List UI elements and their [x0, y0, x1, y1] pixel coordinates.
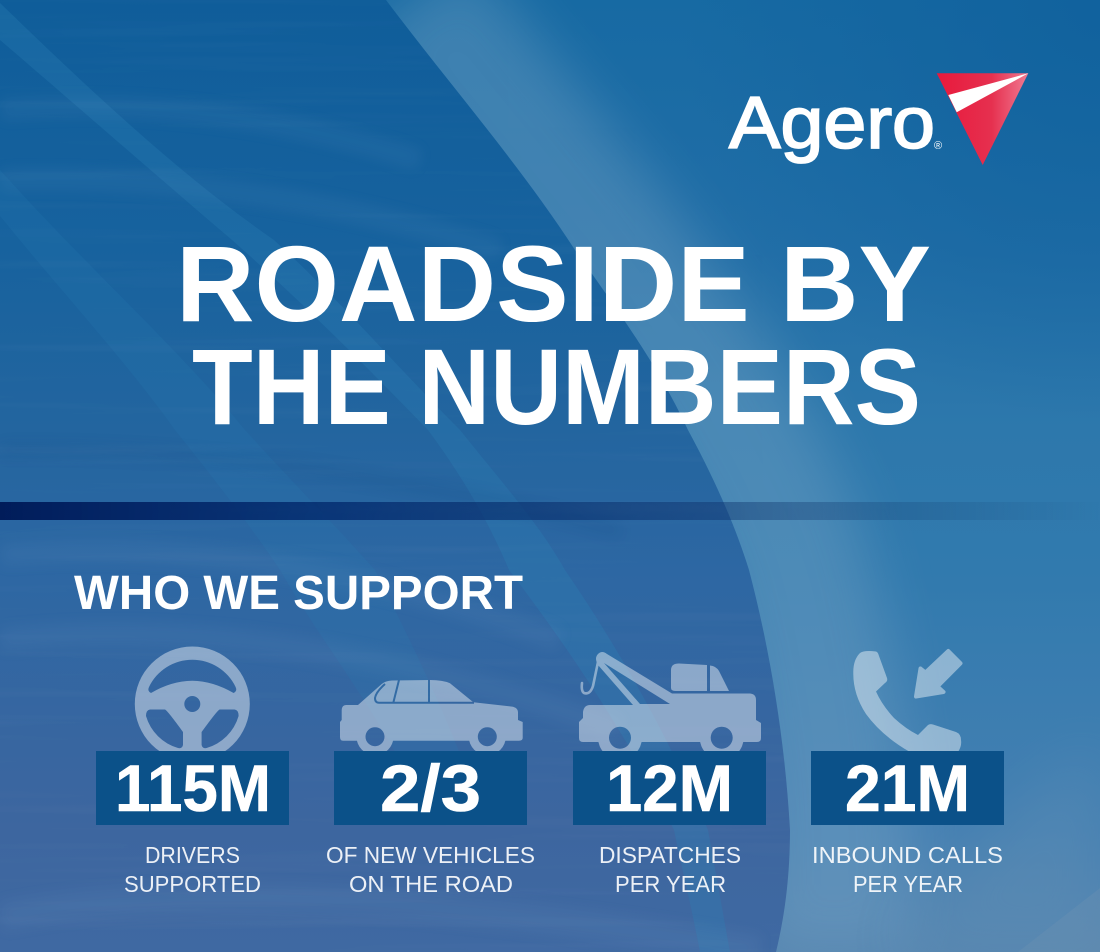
label: inbound calls: PER YEAR: [853, 871, 963, 897]
label: drivers supported: SUPPORTED: [124, 871, 261, 897]
icon: inbound phone: [850, 645, 968, 751]
label: new vehicles: ON THE ROAD: [349, 871, 513, 897]
horizontal band: [0, 502, 1100, 520]
icon: tow truck: [576, 648, 764, 751]
icon: car: [336, 676, 526, 751]
stat box: 12M: [573, 751, 766, 825]
label: new vehicles: [326, 842, 535, 897]
stat box: 2/3: [334, 751, 527, 825]
section heading: WHO WE SUPPORT: [74, 567, 523, 620]
title: THE NUMBERS: [192, 326, 921, 447]
icon: steering wheel: [134, 646, 250, 751]
stat box: 115M: 115M: [115, 751, 271, 825]
stat box: 21M: [811, 751, 1004, 825]
title: ROADSIDE BY: [176, 223, 931, 344]
title: [176, 223, 931, 447]
stat box: 2/3: 2/3: [380, 751, 481, 825]
logo triangle: [937, 73, 1028, 165]
stat box: 12M: 12M: [606, 751, 733, 825]
label: new vehicles: OF NEW VEHICLES: [326, 842, 535, 868]
label: dispatches: PER YEAR: [615, 871, 726, 897]
label: drivers supported: [124, 842, 261, 897]
logo: Agero: [729, 73, 1028, 165]
logo registered mark: ®: [934, 140, 942, 152]
label: inbound calls: INBOUND CALLS: [812, 842, 1003, 868]
label: dispatches: DISPATCHES: [599, 842, 741, 868]
label: inbound calls: [812, 842, 1003, 897]
label: dispatches: [599, 842, 741, 897]
stat box: 21M: 21M: [845, 751, 970, 825]
label: drivers supported: DRIVERS: [145, 842, 240, 868]
logo wordmark: Agero: [729, 83, 935, 164]
